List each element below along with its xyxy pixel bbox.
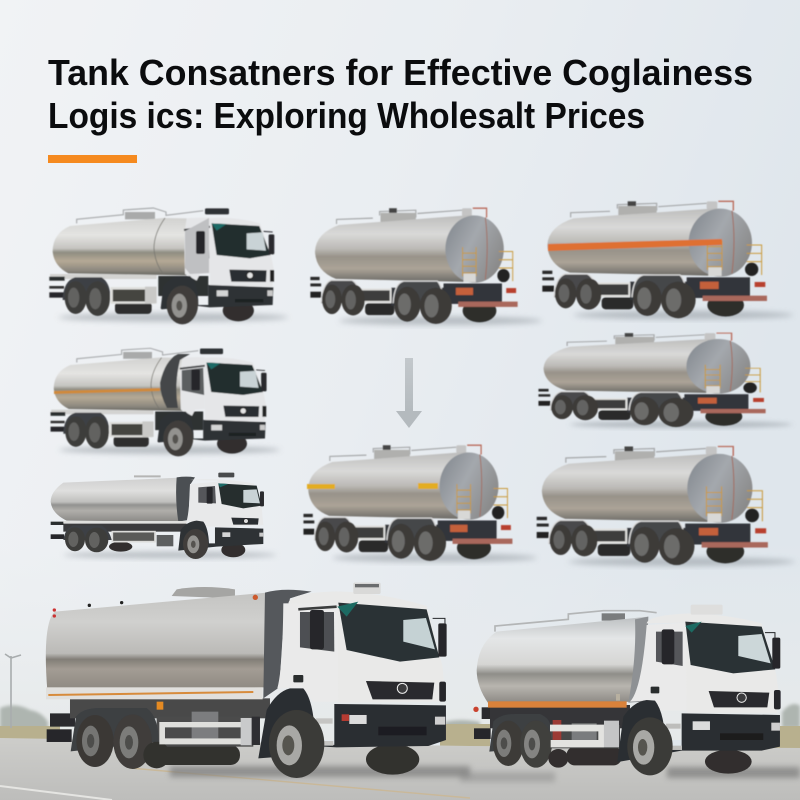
rear chassis <box>47 698 270 765</box>
truck: large front left <box>46 583 447 778</box>
bumper and front wheels <box>617 700 780 775</box>
title <box>48 52 753 136</box>
title: Logis ics: Exploring Wholesalt Prices <box>48 95 645 136</box>
truck: top right tanker with orange stripe <box>542 201 793 319</box>
truck: center tanker with yellow marks <box>303 445 537 562</box>
orange accent bar <box>48 155 137 163</box>
truck: top left cab tanker <box>49 208 288 324</box>
side guard <box>159 717 260 745</box>
truck: lower left cab tanker <box>51 473 277 559</box>
bumper and front wheels <box>258 688 446 778</box>
title: Tank Consatners for Effective Coglainess <box>48 52 753 93</box>
truck: lower right tanker <box>537 446 795 566</box>
cab <box>630 605 781 713</box>
truck: large front right <box>473 605 781 775</box>
side guard <box>550 721 619 747</box>
tank <box>46 587 312 699</box>
tank <box>477 611 657 708</box>
truck: top middle tanker <box>310 208 542 325</box>
truck: middle left cab tanker with orange stripe <box>51 348 280 456</box>
cab <box>277 583 447 703</box>
arrow: down <box>396 358 422 428</box>
rear wheels <box>489 714 568 768</box>
background: airfield scenery <box>0 654 800 800</box>
chassis <box>473 705 630 765</box>
rear wheels <box>71 708 170 769</box>
truck: middle right tanker <box>538 333 792 428</box>
